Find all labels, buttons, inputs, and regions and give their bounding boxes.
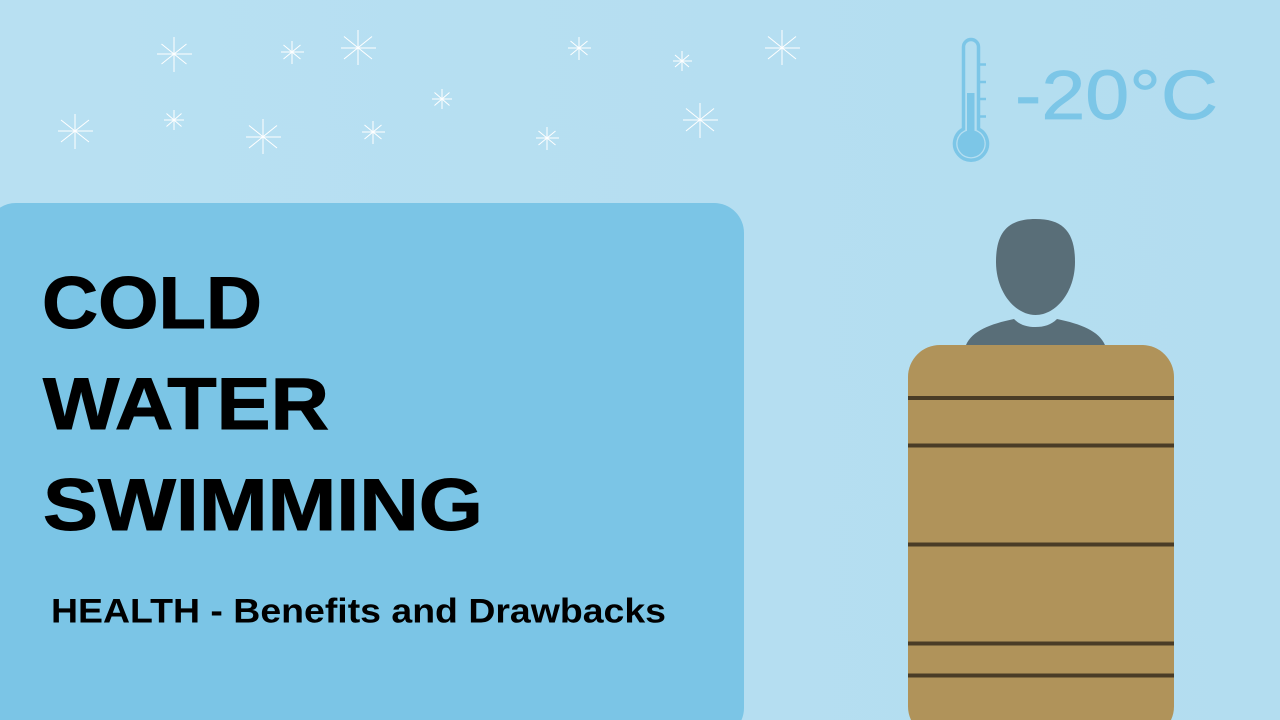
person silhouette <box>966 219 1105 345</box>
title: COLD <box>42 263 262 344</box>
icon: thermometer <box>954 40 988 160</box>
title: SWIMMING <box>43 465 483 546</box>
title <box>42 263 483 546</box>
subtitle: HEALTH - Benefits and Drawbacks <box>51 592 666 630</box>
snowflakes <box>58 30 800 154</box>
panel: title card <box>0 203 744 720</box>
title: WATER <box>43 364 329 445</box>
temperature label: -20°C <box>1015 56 1218 134</box>
barrel <box>908 345 1174 720</box>
